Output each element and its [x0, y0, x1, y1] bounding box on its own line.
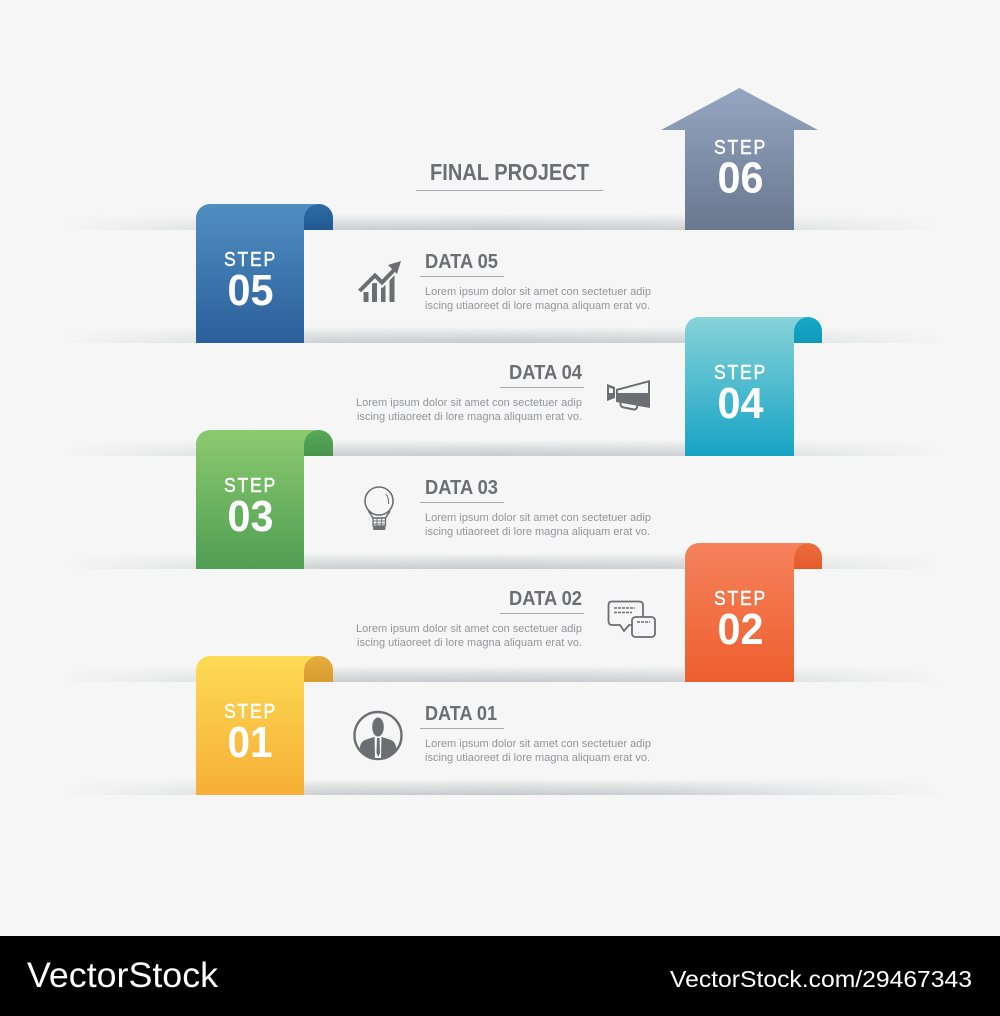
- text block: data 04: iscing utiaoreet di lore magna aliquam erat vo.: [357, 411, 582, 423]
- icon: businessman: [354, 712, 402, 759]
- heading: final project: FINAL PROJECT: [430, 159, 589, 185]
- text block: data 02: iscing utiaoreet di lore magna aliquam erat vo.: [357, 637, 582, 649]
- step 04 ribbon: 04: [718, 379, 764, 428]
- text block: data 03: [420, 477, 651, 538]
- footer bar: VectorStock: [27, 956, 219, 995]
- text block: data 02: DATA 02: [509, 588, 582, 610]
- step 02 ribbon: [685, 543, 822, 682]
- step 04 ribbon: [685, 317, 822, 456]
- icon: light bulb: [365, 487, 393, 530]
- step 02 ribbon: STEP: [714, 588, 767, 610]
- text block: data 05: iscing utiaoreet di lore magna aliquam erat vo.: [425, 300, 650, 312]
- icon: megaphone: [607, 380, 650, 410]
- step 05 ribbon: STEP: [224, 249, 277, 271]
- text block: data 02: [356, 588, 584, 649]
- text block: data 04: Lorem ipsum dolor sit amet con sectetuer adip: [356, 397, 582, 409]
- step 05 ribbon: [196, 204, 333, 343]
- footer bar: VectorStock.com/29467343: [670, 966, 972, 992]
- step 06 arrow: [661, 88, 818, 230]
- text block: data 04: [356, 362, 584, 423]
- step 03 ribbon: [196, 430, 333, 569]
- step 01 ribbon: STEP: [224, 701, 277, 723]
- step 01 ribbon: [196, 656, 333, 795]
- text block: data 01: DATA 01: [425, 703, 497, 725]
- text block: data 01: Lorem ipsum dolor sit amet con sectetuer adip: [425, 738, 651, 750]
- text block: data 03: Lorem ipsum dolor sit amet con sectetuer adip: [425, 512, 651, 524]
- shelf shadows: [114, 214, 888, 795]
- text block: data 04: DATA 04: [509, 362, 583, 384]
- step 04 ribbon: STEP: [714, 362, 767, 384]
- step 05 ribbon: 05: [228, 266, 274, 315]
- footer bar: [0, 936, 1000, 1016]
- text block: data 01: [420, 703, 651, 764]
- text block: data 05: Lorem ipsum dolor sit amet con sectetuer adip: [425, 286, 651, 298]
- step 06 arrow: STEP: [714, 137, 767, 159]
- step 03 ribbon: STEP: [224, 475, 277, 497]
- text block: data 05: DATA 05: [425, 251, 498, 273]
- step 01 ribbon: 01: [228, 718, 272, 767]
- icon: speech bubbles: [608, 602, 655, 637]
- step 06 arrow: 06: [718, 154, 764, 202]
- text block: data 03: iscing utiaoreet di lore magna aliquam erat vo.: [425, 526, 650, 538]
- text block: data 03: DATA 03: [425, 477, 498, 499]
- text block: data 01: iscing utiaoreet di lore magna aliquam erat vo.: [425, 752, 650, 764]
- icon: growth chart: [359, 261, 401, 302]
- step 03 ribbon: 03: [228, 492, 274, 541]
- step 02 ribbon: 02: [718, 605, 764, 654]
- text block: data 05: [420, 251, 651, 312]
- text block: data 02: Lorem ipsum dolor sit amet con sectetuer adip: [356, 623, 582, 635]
